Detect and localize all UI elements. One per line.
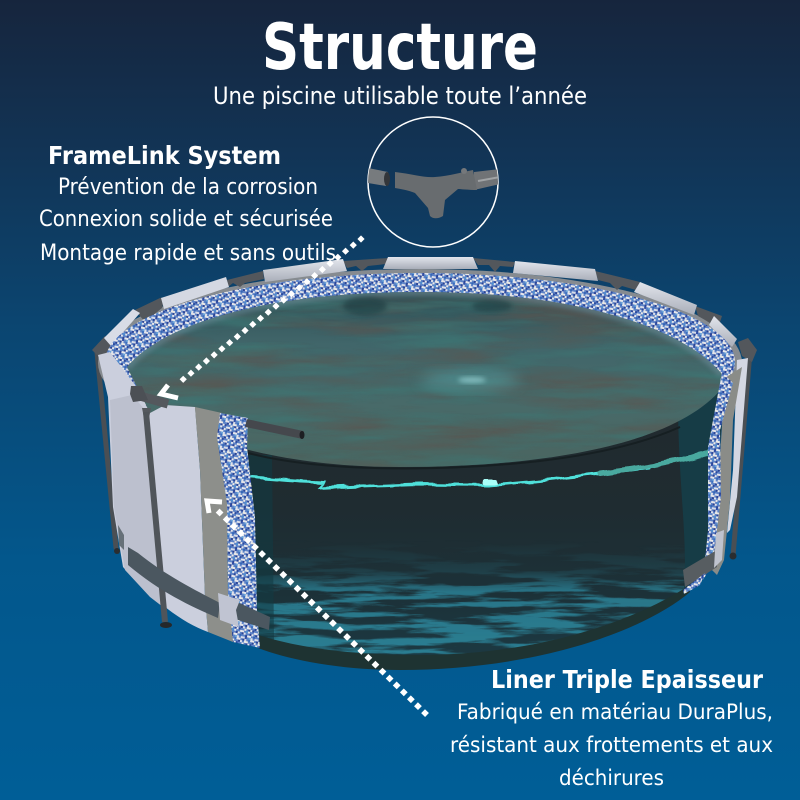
- heading: FrameLink System: [48, 141, 281, 170]
- text block: Liner Triple Epaisseur: [450, 665, 773, 790]
- description line 3: déchirures: [559, 766, 664, 790]
- mosaic liner rim: [105, 273, 735, 451]
- text block: FrameLink System: [39, 141, 336, 266]
- left strap and clip: [118, 525, 270, 630]
- subtitle: Une piscine utilisable toute l’année: [213, 82, 587, 110]
- arrowhead: [161, 385, 178, 398]
- feature line 2: Connexion solide et sécurisée: [39, 207, 333, 232]
- dotted arrow: Liner: [207, 501, 427, 715]
- right pipe: [474, 169, 500, 190]
- cyan waterline: [252, 450, 716, 488]
- right side liner and panels: [683, 358, 748, 594]
- top rail panels: [104, 257, 737, 347]
- description line 1: Fabriqué en matériau DuraPlus,: [457, 700, 773, 724]
- back frame joints: [92, 258, 757, 362]
- description line 2: résistant aux frottements et aux: [450, 733, 773, 757]
- arrowhead: [207, 501, 222, 513]
- water surface: [120, 285, 730, 475]
- back frame legs: [97, 352, 750, 560]
- feature line 3: Montage rapide et sans outils: [40, 241, 336, 266]
- wall cutaway: [247, 392, 722, 655]
- rim ring: [98, 269, 742, 457]
- pool illustration: [92, 257, 757, 680]
- grey liner band: [195, 407, 233, 642]
- title: Structure: [262, 11, 538, 85]
- feature line 1: Prévention de la corrosion: [58, 175, 318, 200]
- left pipe end: [368, 168, 388, 186]
- heading: Liner Triple Epaisseur: [491, 665, 764, 694]
- front top rail: [130, 386, 304, 439]
- detail circle: connector: [368, 117, 500, 247]
- mosaic liner strip left: [217, 413, 260, 648]
- left outer panel: [98, 352, 208, 632]
- front vertical leg: [146, 412, 165, 622]
- dotted arrow: FrameLink: [161, 235, 365, 398]
- pool floor ring: [258, 585, 690, 670]
- T connector: [395, 170, 477, 218]
